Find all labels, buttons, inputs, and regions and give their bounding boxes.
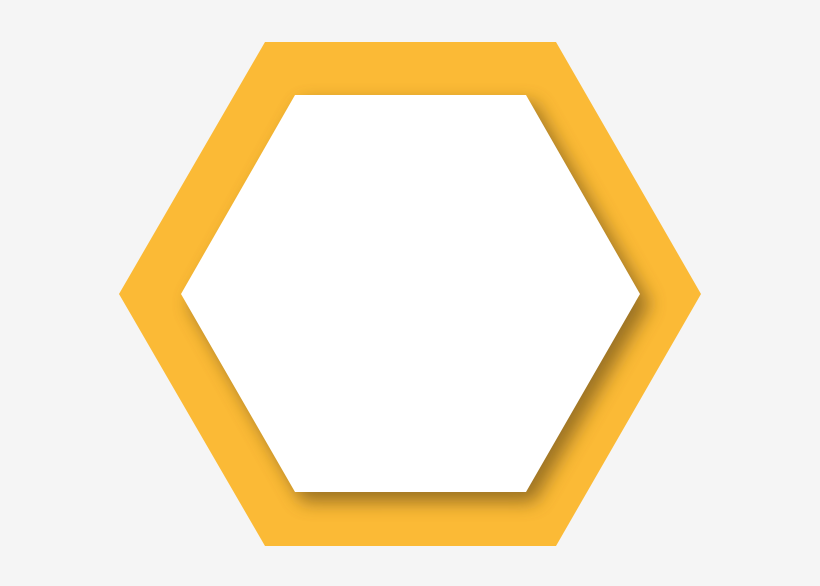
- outer yellow hexagon: [119, 42, 701, 546]
- inner shadow: [189, 103, 650, 502]
- hexagon frame graphic: [119, 42, 701, 546]
- inner white hexagon: [181, 95, 640, 492]
